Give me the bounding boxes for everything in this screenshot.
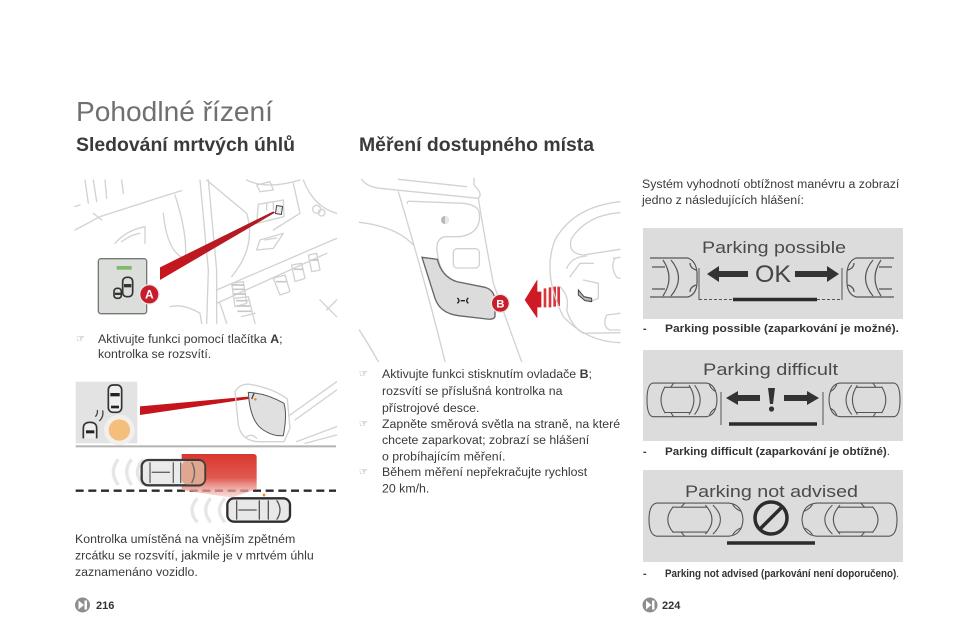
text: parking measurement instructions bbox=[359, 367, 620, 496]
illustration: mirror indicator and blind spot bbox=[76, 382, 337, 522]
panel: parking possible bbox=[643, 228, 903, 319]
text: system evaluates difficulty: Systém vyhodnotí obtížnost manévru a zobrazí bbox=[642, 177, 900, 191]
text: parking measurement instructions: ☞ bbox=[359, 419, 368, 430]
motion ghosts bbox=[113, 459, 225, 522]
red arrow bbox=[525, 279, 559, 318]
red pointer wedge A bbox=[160, 211, 275, 280]
car in adjacent lane bbox=[142, 460, 205, 485]
text: mirror indicator description: zaznamenáno vozidlo. bbox=[75, 565, 198, 579]
text: parking measurement instructions: 20 km/h. bbox=[382, 482, 429, 496]
badge A: A bbox=[145, 288, 154, 302]
panel: parking possible: OK bbox=[755, 261, 791, 288]
text: activate with button A bbox=[76, 332, 283, 361]
red pointer wedge bbox=[140, 397, 249, 415]
text: parking measurement instructions: rozsvítí se příslušná kontrolka na bbox=[382, 384, 563, 398]
caption: parking possible: Parking possible (zaparkování je možné). bbox=[665, 323, 899, 335]
steering wheel bbox=[550, 202, 620, 343]
panel: parking difficult bbox=[643, 350, 903, 441]
panel: parking difficult: Parking difficult bbox=[703, 360, 838, 379]
illustration: dashboard with button A bbox=[75, 180, 337, 323]
text: mirror indicator description: Kontrolka umístěná na vnějším zpětném bbox=[75, 532, 295, 546]
caption: parking difficult: Parking difficult (zaparkování je obtížné) . bbox=[665, 446, 890, 458]
switch highlight bbox=[275, 206, 283, 214]
page reference 216: 216 bbox=[96, 600, 114, 612]
text: parking measurement instructions: ☞ bbox=[359, 369, 368, 380]
door mirror bbox=[235, 382, 337, 443]
text: mirror indicator description: zrcátku se rozsvítí, jakmile je v mrtvém úhlu bbox=[75, 548, 314, 562]
button A panel bbox=[98, 259, 147, 314]
text: parking measurement instructions: o probíhajícím měření. bbox=[382, 450, 506, 464]
badge A bbox=[140, 285, 159, 304]
page reference 224: 224 bbox=[662, 600, 681, 612]
heading: blind spot monitoring: Sledování mrtvých úhlů bbox=[76, 135, 295, 156]
text: system evaluates difficulty: jedno z následujících hlášení: bbox=[641, 193, 804, 207]
text: mirror indicator description bbox=[75, 532, 314, 579]
red blind spot zone bbox=[182, 454, 257, 498]
heading: parking space measurement: Měření dostupného místa bbox=[359, 135, 594, 156]
badge B: B bbox=[496, 298, 504, 310]
panel: parking possible: Parking possible bbox=[702, 238, 846, 257]
text: parking measurement instructions: ☞ bbox=[359, 467, 368, 478]
caption: parking possible: - bbox=[643, 323, 647, 335]
text: activate with button A: Aktivujte funkci pomocí tlačítka A; bbox=[98, 332, 283, 346]
dashed lane line bbox=[76, 487, 336, 494]
own car bbox=[227, 494, 290, 522]
title: Pohodlné řízení bbox=[76, 96, 273, 127]
text: activate with button A: kontrolka se rozsvítí. bbox=[98, 347, 211, 361]
text: system evaluates difficulty bbox=[641, 177, 900, 207]
caption: parking not advised: Parking not advised (parkování není doporučeno). bbox=[665, 568, 899, 580]
badge B bbox=[491, 294, 509, 312]
caption: parking not advised: - bbox=[643, 568, 647, 580]
page reference 216 bbox=[75, 598, 114, 612]
text: activate with button A: ☞ bbox=[76, 334, 85, 345]
text: parking measurement instructions: Aktivujte funkci stisknutím ovladače B; bbox=[382, 367, 592, 381]
inset with warning lamp bbox=[76, 382, 137, 445]
text: parking measurement instructions: Během měření nepřekračujte rychlost bbox=[382, 465, 588, 479]
panel: parking not advised bbox=[643, 470, 903, 562]
panel: parking not advised: Parking not advised bbox=[685, 482, 858, 501]
text: parking measurement instructions: chcete zaparkovat; zobrazí se hlášení bbox=[382, 433, 590, 447]
text: parking measurement instructions: Zapněte směrová světla na straně, na které bbox=[382, 417, 620, 431]
illustration: steering wheel with control B bbox=[359, 178, 620, 362]
page reference 224 bbox=[642, 598, 681, 612]
control B paddle bbox=[422, 257, 495, 319]
text: parking measurement instructions: přístrojové desce. bbox=[382, 401, 479, 415]
caption: parking difficult: - bbox=[643, 446, 647, 458]
